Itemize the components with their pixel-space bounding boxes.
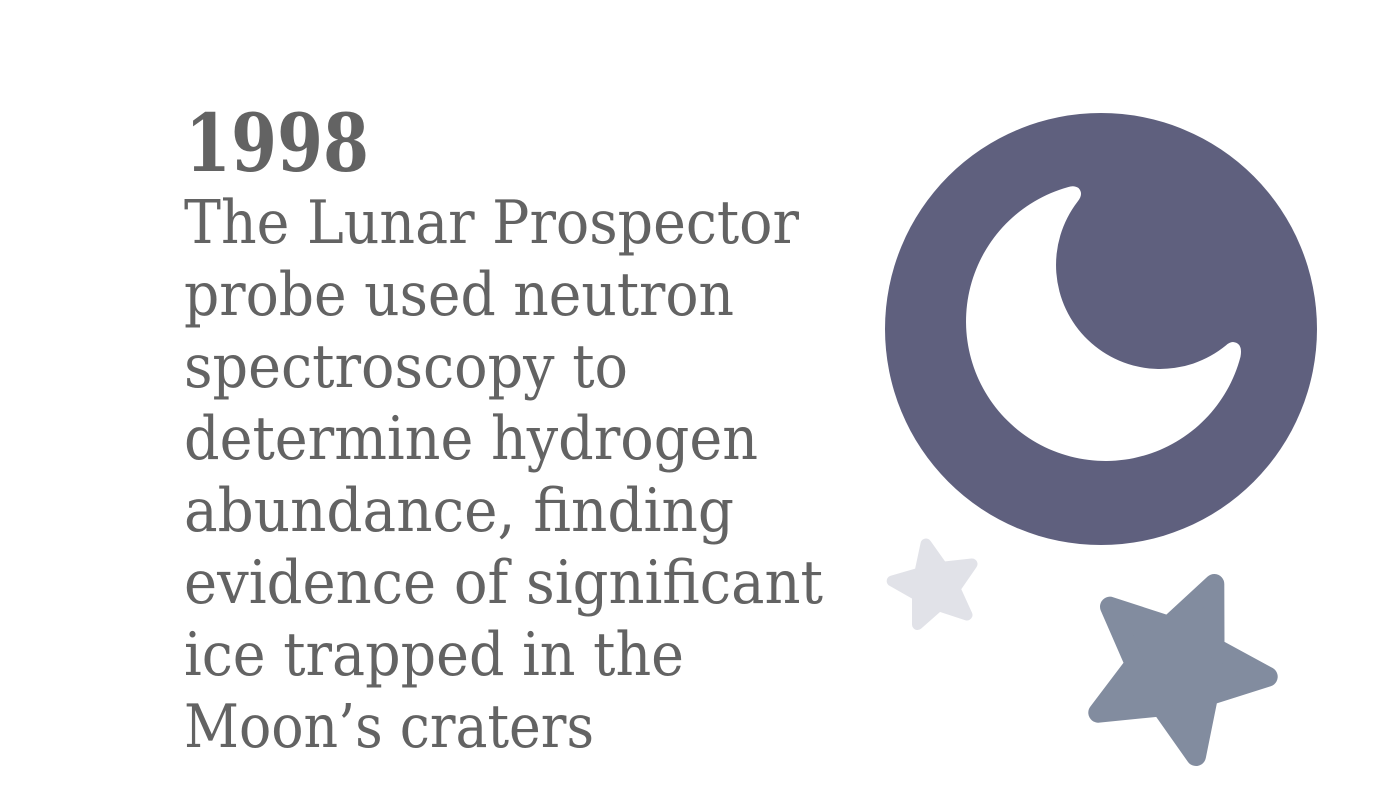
icon: moon in circle <box>885 113 1317 545</box>
text block: description: spectroscopy to <box>184 332 628 402</box>
text block: description: determine hydrogen <box>184 404 758 474</box>
icon: small star <box>892 544 972 624</box>
text block: description: Moon’s craters <box>184 692 594 762</box>
text block: description: The Lunar Prospector <box>184 188 799 258</box>
text block: description: abundance, finding <box>184 476 734 546</box>
text block: description <box>184 188 823 762</box>
text block: description: evidence of significant <box>184 548 823 618</box>
text block: description: ice trapped in the <box>184 620 684 690</box>
text block: description: probe used neutron <box>184 260 734 330</box>
heading: year: 1998 <box>185 96 369 190</box>
icon: large star <box>1098 584 1268 756</box>
